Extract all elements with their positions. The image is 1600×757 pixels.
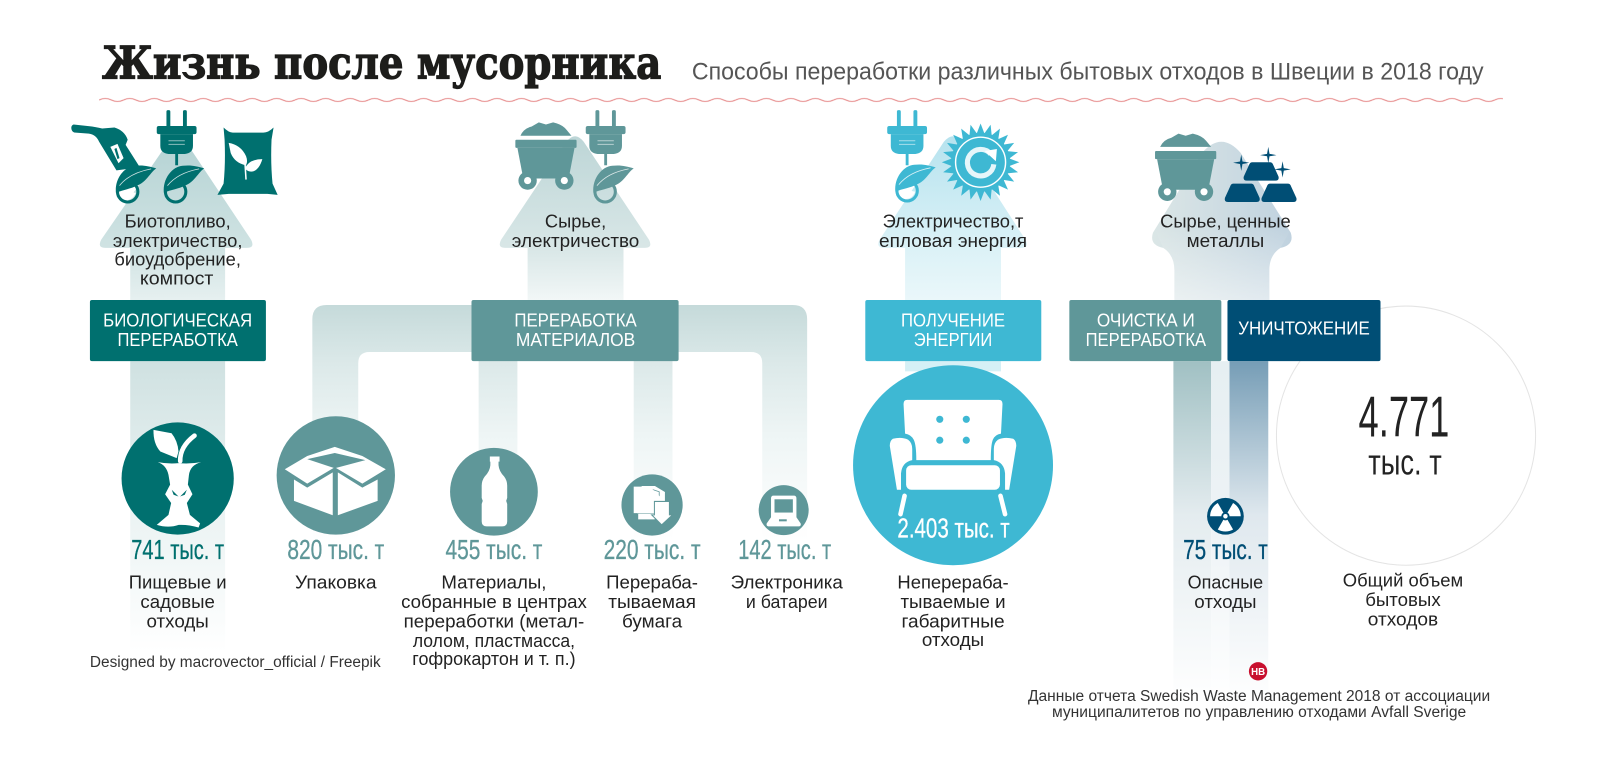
text: biological output: [113, 211, 242, 289]
icon: bottle circle: [450, 448, 538, 536]
label: paper: бумага: [622, 610, 683, 631]
label: food: Пищевые и: [129, 572, 227, 593]
label: bulky: тываемые и: [900, 591, 1006, 612]
text: biological output: биоудобрение,: [114, 248, 241, 269]
figure: materials: 455 тыс. т: [445, 534, 543, 565]
box: biological processing: БИОЛОГИЧЕСКАЯ: [103, 309, 252, 330]
figure: food: 741 тыс. т: [131, 534, 224, 565]
box: energy recovery: ЭНЕРГИИ: [914, 329, 992, 350]
box: cleaning and processing: ОЧИСТКА И: [1097, 309, 1195, 330]
label: materials: гофрокартон и т. п.): [412, 648, 576, 669]
icon: cart and plug (materials): [515, 110, 634, 202]
box: biological processing: [90, 300, 266, 361]
label: materials: собранные в центрах: [401, 591, 587, 612]
label: food: отходы: [147, 610, 209, 631]
label: hazardous: [1188, 572, 1263, 612]
label: bulky: [897, 572, 1009, 650]
subtitle: Способы переработки различных бытовых отходов в Швеции в 2018 году: [692, 59, 1484, 86]
label: electronics: Электроника: [731, 572, 844, 593]
text: biological output: компост: [140, 268, 214, 289]
label: total: бытовых: [1365, 589, 1441, 610]
label: packaging: Упаковка: [295, 572, 377, 593]
box: cleaning and processing: [1069, 300, 1221, 361]
label: electronics: [731, 572, 844, 612]
icon: paper circle: [621, 474, 683, 536]
figure: electronics: 142 тыс. т: [738, 534, 831, 565]
text: energy output: Электричество,т: [883, 211, 1024, 232]
text: treatment output: [1160, 211, 1291, 251]
figure: hazardous: 75 тыс. т: [1183, 534, 1268, 565]
arrow: biological: [100, 136, 252, 657]
label: electronics: и батареи: [746, 591, 828, 612]
text: energy output: епловая энергия: [879, 230, 1027, 251]
label: materials: Материалы,: [441, 572, 546, 593]
icon: fertilizer bag: [217, 128, 278, 195]
icon: leaf with drop: [116, 165, 156, 202]
text: biological output: Биотопливо,: [125, 211, 231, 232]
label: bulky: Неперераба-: [897, 572, 1009, 593]
text: materials output: Сырье,: [545, 211, 606, 232]
icon: packaging circle: [277, 416, 395, 535]
label: food: [129, 572, 227, 631]
icon: radiation circle: [1207, 498, 1244, 535]
logo: NV: [1249, 662, 1267, 680]
label: total: Общий объем: [1343, 570, 1463, 591]
box: destruction: УНИЧТОЖЕНИЕ: [1238, 318, 1370, 339]
arrow: treatment and destruction: [1152, 142, 1292, 704]
text: treatment output: металлы: [1187, 230, 1264, 251]
text: materials output: электричество: [512, 230, 639, 251]
icon: recycling sun: [942, 123, 1019, 201]
total circle: 4.771: [1359, 386, 1449, 450]
label: bulky: отходы: [922, 629, 984, 650]
text: materials output: [512, 211, 639, 251]
figure: bulky: 2.403 тыс. т: [897, 513, 1010, 544]
source note: Данные отчета Swedish Waste Management 2018 от ассоциации: [1028, 688, 1490, 705]
label: materials: лолом, пластмасса,: [413, 630, 575, 651]
total circle: тыс. т: [1368, 442, 1442, 482]
icon: plug and leaf: [157, 110, 204, 202]
source note: муниципалитетов по управлению отходами Avfall Sverige: [1052, 704, 1466, 721]
title: Жизнь после мусорника: [102, 37, 661, 90]
box: materials recycling: МАТЕРИАЛОВ: [516, 329, 635, 350]
label: total: [1343, 570, 1463, 629]
label: total: отходов: [1368, 608, 1438, 629]
label: paper: Перераба-: [606, 572, 698, 593]
label: materials: переработки (метал-: [404, 610, 584, 631]
box: biological processing: ПЕРЕРАБОТКА: [117, 329, 239, 350]
figure: paper: 220 тыс. т: [604, 534, 701, 565]
icon: gold bars: [1225, 147, 1297, 202]
total circle: [1276, 306, 1536, 565]
box: energy recovery: ПОЛУЧЕНИЕ: [901, 309, 1005, 330]
icon: fuel nozzle: [71, 124, 140, 170]
label: hazardous: Опасные: [1188, 572, 1263, 593]
label: hazardous: отходы: [1194, 591, 1257, 612]
credit: Designed by macrovector_official / Freepik: [90, 654, 381, 671]
icon: electronics circle: [759, 485, 809, 535]
arrow: energy: [878, 136, 1027, 371]
figure: packaging: 820 тыс. т: [287, 534, 385, 565]
source note: [1028, 688, 1490, 721]
label: materials: [401, 572, 587, 669]
box: cleaning and processing: ПЕРЕРАБОТКА: [1086, 329, 1207, 350]
box: materials recycling: [471, 300, 679, 361]
box: materials recycling: ПЕРЕРАБОТКА: [514, 309, 637, 330]
icon: armchair circle: [853, 365, 1053, 565]
label: paper: тываемая: [608, 591, 696, 612]
text: biological output: электричество,: [113, 230, 242, 251]
label: paper: [606, 572, 698, 631]
icon: cart (treatment): [1155, 134, 1216, 201]
icon: food waste circle: [122, 422, 234, 535]
label: bulky: габаритные: [902, 610, 1005, 631]
arrow: materials: [500, 136, 650, 300]
box: energy recovery: [865, 300, 1041, 361]
label: food: садовые: [140, 591, 215, 612]
logo: NV: НВ: [1251, 667, 1265, 678]
bracket: materials streams: [312, 305, 807, 541]
icon: plug and leaf (energy): [887, 110, 936, 201]
text: energy output: [879, 211, 1027, 251]
text: treatment output: Сырье, ценные: [1160, 211, 1291, 232]
box: destruction: [1227, 300, 1381, 361]
